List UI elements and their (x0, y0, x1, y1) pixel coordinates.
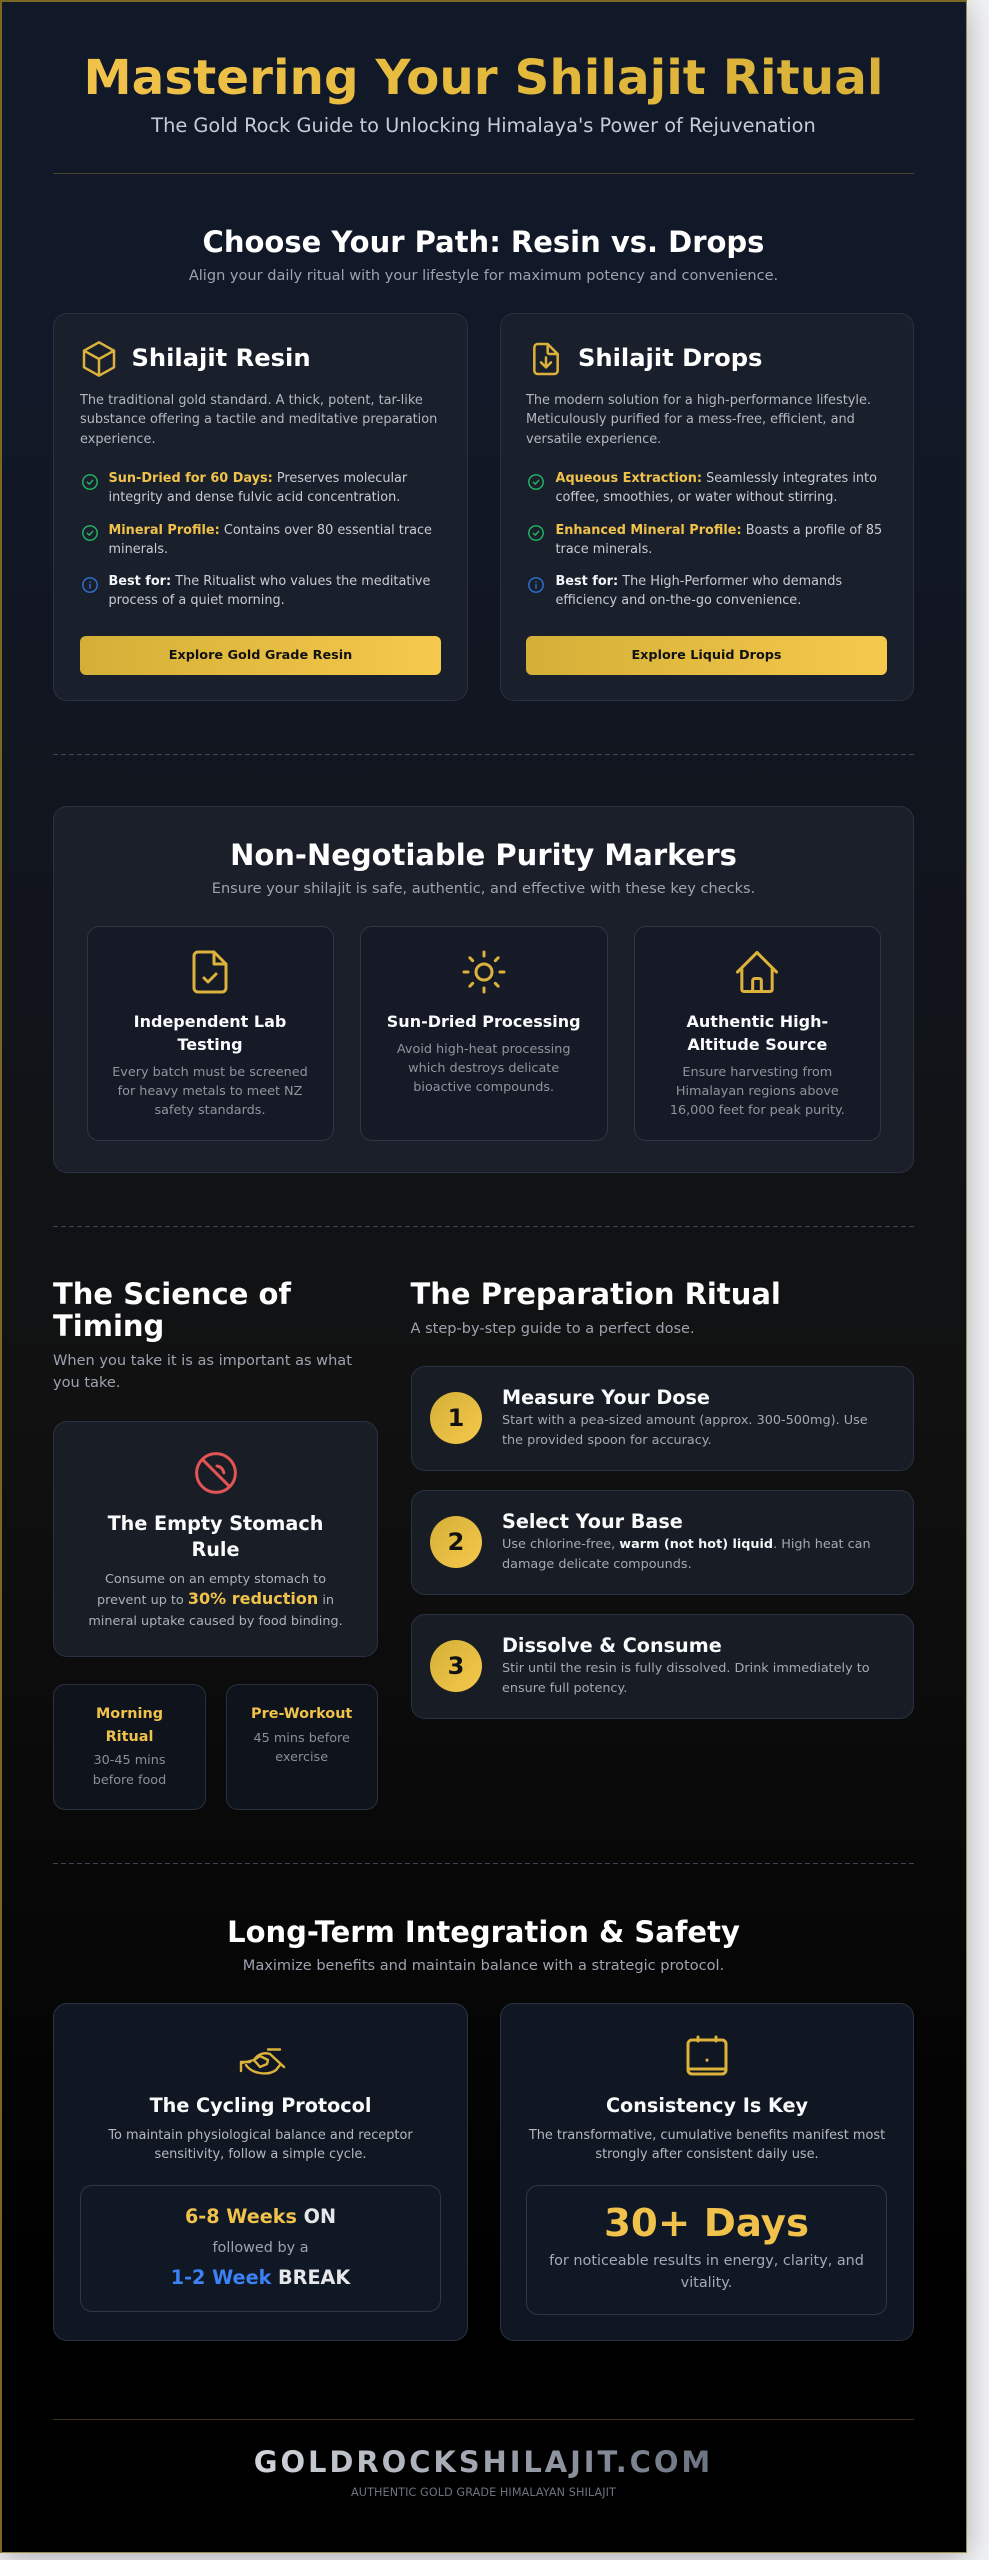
panel: shilajit resin (53, 313, 468, 701)
card text: Every batch must be screened (112, 1064, 308, 1080)
number badge (430, 1640, 482, 1692)
feature: mineral profile: Mineral Profile: Contains over 80 essential trace (108, 522, 432, 538)
description (526, 393, 871, 447)
feature: aqueous extraction: Aqueous Extraction: Seamlessly integrates into (556, 471, 877, 486)
section subtitle (53, 1352, 352, 1391)
card text: 16,000 feet for peak purity. (670, 1103, 845, 1118)
brand: GOLDROCKSHILAJIT.COM (254, 2445, 713, 2479)
card text: which destroys delicate (408, 1061, 559, 1076)
feature: enhanced mineral profile: trace minerals. (556, 542, 652, 557)
description: The modern solution for a high-performance lifestyle. (526, 393, 871, 408)
step 3 (410, 1614, 914, 1719)
feature: sun-dried: integrity and dense fulvic acid concentration. (108, 490, 400, 505)
card title: The Cycling Protocol (150, 2094, 371, 2117)
card title: Sun-Dried Processing (387, 1012, 581, 1031)
button (80, 636, 441, 675)
card text: strongly after consistent daily use. (595, 2147, 819, 2162)
feature: best for: efficiency and on-the-go convenience. (556, 593, 801, 608)
card title (686, 1012, 828, 1054)
card title (96, 1706, 163, 1745)
callout: 30+ days (526, 2184, 887, 2314)
card text: Consume on an empty stomach to (105, 1572, 326, 1587)
card text: The transformative, cumulative benefits manifest most (529, 2128, 885, 2143)
feature: best for: process of a quiet morning. (108, 593, 285, 608)
feature: aqueous extraction: coffee, smoothies, or water without stirring. (556, 490, 838, 505)
card text: Ensure harvesting from (682, 1064, 832, 1080)
card text: exercise (275, 1750, 328, 1765)
feature: enhanced mineral profile: Enhanced Mineral Profile: Boasts a profile of 85 (556, 522, 882, 538)
tagline: AUTHENTIC GOLD GRADE HIMALAYAN SHILAJIT (351, 2486, 616, 2499)
card: morning ritual (53, 1684, 206, 1810)
icon: sun (462, 950, 506, 994)
feature: sun-dried: Sun-Dried for 60 Days: Preserves molecular (108, 471, 407, 486)
card title (134, 1012, 286, 1054)
card text (670, 1064, 845, 1118)
button: Explore Gold Grade Resin (169, 648, 352, 663)
heading (53, 1277, 292, 1343)
step text: Use chlorine-free, warm (not hot) liquid. High heat can (502, 1537, 871, 1552)
card text: sensitivity, follow a simple cycle. (154, 2147, 366, 2162)
icon: no food (195, 1452, 237, 1494)
icon: check (528, 474, 544, 490)
icon: file check (192, 950, 228, 994)
feature: mineral profile (108, 522, 432, 557)
icon: cycle (220, 2030, 300, 2090)
stat text: vitality. (681, 2274, 732, 2290)
card text: mineral uptake caused by food binding. (88, 1614, 343, 1628)
card title: Consistency Is Key (606, 2094, 808, 2117)
feature: best for: Best for: The High-Performer who demands (556, 574, 842, 589)
feature: best for: Best for: The Ritualist who values the meditative (108, 574, 430, 589)
panel: empty stomach rule (53, 1421, 378, 1657)
weeks on: 6-8 Weeks ON (185, 2205, 336, 2228)
icon: info (528, 577, 544, 593)
number badge: 2 (448, 1528, 464, 1556)
card text: Himalayan regions above (676, 1084, 839, 1099)
card text: for heavy metals to meet NZ (118, 1084, 302, 1099)
section heading: choose your path (189, 225, 778, 284)
number badge: 3 (448, 1652, 464, 1680)
feature: best for (108, 574, 430, 608)
panel: consistency (500, 2003, 914, 2341)
description: The traditional gold standard. A thick, potent, tar-like (80, 393, 423, 408)
card title: Authentic High- (687, 1012, 828, 1031)
section: science of timing heading (53, 1277, 352, 1391)
card: lab testing (86, 926, 334, 1141)
number badge: 1 (448, 1404, 464, 1432)
card text (93, 1753, 166, 1788)
section subtitle: Maximize benefits and maintain balance with a strategic protocol. (243, 1957, 724, 1974)
step text: damage delicate compounds. (502, 1557, 692, 1572)
step text: ensure full potency. (502, 1681, 627, 1696)
step text: Start with a pea-sized amount (approx. 300-500mg). Use (502, 1413, 868, 1428)
card text: safety standards. (154, 1103, 266, 1118)
card title: Independent Lab (134, 1012, 286, 1031)
card heading: Shilajit Resin (132, 344, 311, 372)
card: sun-dried processing (360, 926, 608, 1141)
card text: Avoid high-heat processing (397, 1042, 570, 1056)
card title: Morning (96, 1706, 163, 1722)
description: versatile experience. (526, 432, 661, 447)
feature: enhanced mineral profile (556, 522, 882, 557)
step 2 (410, 1490, 914, 1595)
panel: purity markers (53, 806, 914, 1173)
step text (502, 1413, 868, 1448)
big stat: 30+ Days (604, 2201, 809, 2246)
step text: the provided spoon for accuracy. (502, 1433, 712, 1448)
section subtitle: Align your daily ritual with your lifestyle for maximum potency and convenience. (189, 267, 778, 284)
card text (53, 2126, 468, 2165)
card title: Testing (177, 1035, 243, 1054)
connector text: followed by a (212, 2240, 309, 2256)
heading: Timing (53, 1309, 164, 1343)
number badge (430, 1392, 482, 1444)
button: Explore Liquid Drops (631, 648, 782, 663)
week break: 1-2 Week BREAK (171, 2266, 350, 2289)
description: substance offering a tactile and meditative preparation (80, 412, 437, 427)
card text: before food (93, 1773, 166, 1788)
section subtitle: Ensure your shilajit is safe, authentic, and effective with these key checks. (212, 880, 755, 897)
card text (112, 1064, 308, 1118)
description: Meticulously purified for a mess-free, efficient, and (526, 412, 855, 427)
icon: file download (533, 342, 559, 376)
feature: best for (556, 574, 842, 608)
card text: To maintain physiological balance and receptor (108, 2128, 413, 2143)
feature: mineral profile: minerals. (108, 542, 168, 557)
stat text (526, 2250, 887, 2294)
step text (502, 1537, 871, 1572)
icon: info (82, 577, 98, 593)
card text (500, 2126, 914, 2165)
section subtitle: A step-by-step guide to a perfect dose. (410, 1320, 695, 1337)
heading: Long-Term Integration & Safety (227, 1915, 740, 1949)
section: preparation ritual heading (410, 1277, 781, 1337)
step title: Dissolve & Consume (502, 1634, 722, 1657)
step 1 (410, 1366, 914, 1471)
section heading: long-term integration (0, 1914, 967, 1976)
stat text: for noticeable results in energy, clarity, and (549, 2252, 864, 2268)
icon: home (736, 950, 778, 993)
icon: cube (82, 341, 116, 377)
description: experience. (80, 432, 156, 447)
step text (502, 1661, 870, 1696)
panel: shilajit drops (500, 313, 914, 701)
feature: sun-dried (108, 471, 408, 505)
card title: The Empty Stomach (108, 1512, 323, 1535)
callout: on/off schedule (80, 2184, 441, 2312)
heading: The Preparation Ritual (410, 1277, 781, 1311)
heading: Non-Negotiable Purity Markers (230, 838, 737, 872)
card heading: Shilajit Drops (578, 344, 762, 372)
card title: Pre-Workout (251, 1706, 352, 1722)
card title: Altitude Source (687, 1035, 827, 1054)
heading: Choose Your Path: Resin vs. Drops (203, 225, 764, 259)
card text: prevent up to 30% reduction in (97, 1589, 334, 1608)
card text (397, 1042, 570, 1095)
step title: Select Your Base (502, 1510, 683, 1533)
number badge (430, 1516, 482, 1568)
subtitle: The Gold Rock Guide to Unlocking Himalaya's Power of Rejuvenation (151, 114, 816, 137)
card text: 45 mins before (253, 1731, 350, 1746)
icon: check (82, 474, 98, 490)
button (526, 636, 887, 675)
title: Mastering Your Shilajit Ritual (84, 50, 883, 106)
heading: The Science of (53, 1277, 291, 1311)
feature: aqueous extraction (556, 471, 877, 505)
icon: check (528, 525, 544, 541)
card text (253, 1731, 350, 1765)
card text: bioactive compounds. (413, 1080, 554, 1095)
card: pre-workout (226, 1684, 378, 1810)
card title: Ritual (106, 1729, 153, 1745)
panel: cycling protocol (53, 2003, 468, 2341)
step title: Measure Your Dose (502, 1386, 710, 1409)
footer (0, 2419, 967, 2509)
icon: calendar (683, 2031, 731, 2079)
card title: Rule (191, 1538, 240, 1560)
card text: 30-45 mins (93, 1753, 166, 1768)
icon: check (82, 525, 98, 541)
card: high-altitude source (634, 926, 881, 1141)
card title (108, 1512, 323, 1560)
card text (88, 1572, 343, 1628)
description (80, 393, 437, 447)
section subtitle: When you take it is as important as what (53, 1352, 352, 1368)
step text: Stir until the resin is fully dissolved. Drink immediately to (502, 1661, 870, 1676)
header: title block (84, 50, 883, 137)
section subtitle: you take. (53, 1374, 120, 1391)
